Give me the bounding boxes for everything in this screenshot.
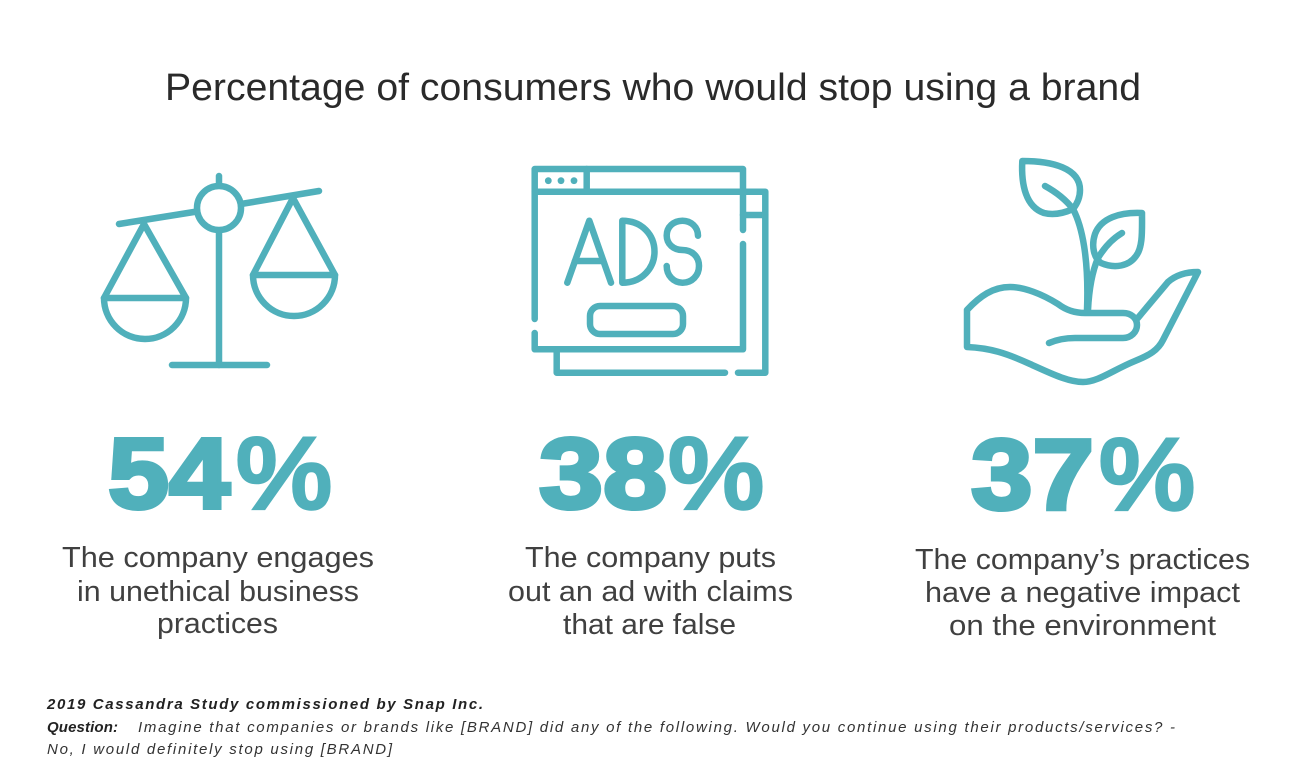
statistic: 37%: % [1099, 419, 1195, 531]
panel: environmental impact [915, 161, 1250, 642]
statistic: 54% [108, 418, 332, 530]
footnote: source and question [46, 696, 1175, 758]
footnote: source and question: 2019 Cassandra Study commissioned by Snap Inc. [46, 696, 483, 713]
description: environment impact [915, 544, 1250, 642]
statistic: 38% [539, 418, 764, 530]
footnote: source and question: Imagine that companies or brands like [BRAND] did any of the following. Would you continue using their products/services? - [138, 719, 1175, 736]
description: unethical practices: in unethical business [77, 576, 359, 608]
description: unethical practices: The company engages [62, 542, 374, 574]
statistic: 54%: % [236, 418, 332, 530]
statistic: 54%: 54 [108, 418, 230, 530]
icon: balance scale [104, 176, 335, 365]
description: unethical practices: practices [157, 608, 278, 640]
description: unethical practices [62, 542, 374, 640]
statistic: 38%: 38 [539, 418, 667, 530]
footnote: source and question: No, I would definitely stop using [BRAND] [47, 741, 393, 758]
title: Percentage of consumers who would stop using a brand [165, 67, 1141, 109]
panel: unethical business practices [62, 176, 374, 640]
icon: ads browser window [535, 169, 765, 373]
statistic: 37% [971, 419, 1195, 531]
description: false ad claims: that are false [563, 609, 736, 641]
statistic: 37%: 37 [971, 419, 1094, 531]
description: false ad claims [508, 542, 793, 641]
description: false ad claims: The company puts [525, 542, 776, 574]
description: environment impact: have a negative impact [925, 577, 1240, 609]
description: environment impact: The company’s practices [915, 544, 1250, 576]
description: environment impact: on the environment [949, 610, 1216, 642]
statistic: 38%: % [668, 418, 764, 530]
footnote: source and question: Question: [47, 719, 118, 736]
panel: false advertising [508, 169, 793, 641]
description: false ad claims: out an ad with claims [508, 576, 793, 608]
icon: hand holding plant [967, 161, 1198, 382]
